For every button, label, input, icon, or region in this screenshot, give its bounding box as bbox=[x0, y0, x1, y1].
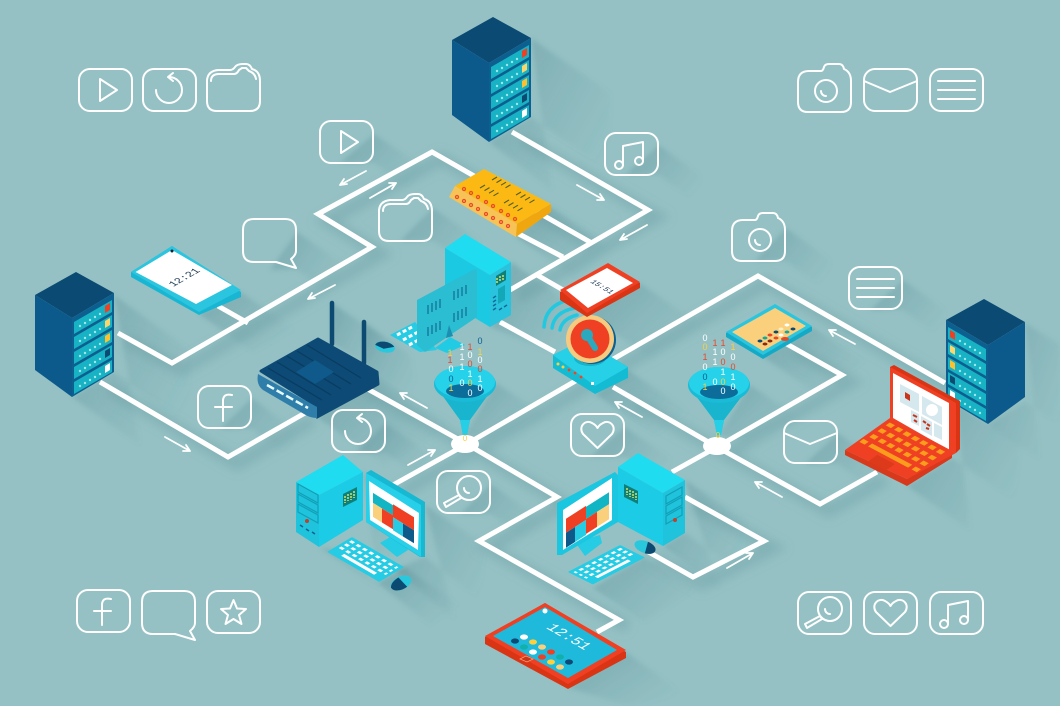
binary digits: 0 bbox=[702, 372, 708, 382]
junction node left bbox=[451, 435, 479, 453]
yellow circuit board bbox=[449, 169, 551, 237]
red laptop bbox=[845, 365, 960, 486]
laptop screen bbox=[890, 365, 960, 453]
icon: heart bbox=[571, 414, 624, 456]
icon: heart bbox=[864, 592, 917, 634]
white tablet with clock: 12:21 bbox=[166, 267, 204, 289]
icon row: bottom right bbox=[798, 592, 983, 634]
icon: list bbox=[930, 69, 983, 111]
red tablet with clock: 12:51 bbox=[541, 621, 596, 653]
icon: speech bubble bbox=[243, 219, 296, 268]
right desktop computer bbox=[557, 453, 685, 584]
icon row: top right bbox=[798, 64, 983, 112]
icon: search bbox=[437, 471, 490, 513]
base box bbox=[553, 340, 628, 394]
central computer bbox=[374, 234, 511, 354]
laptop base bbox=[845, 418, 956, 486]
icon: mail bbox=[864, 69, 917, 111]
icon: folder bbox=[207, 64, 260, 111]
icon: facebook bbox=[198, 386, 251, 428]
junction node right bbox=[703, 437, 731, 455]
red tablet with clock bbox=[485, 603, 626, 689]
wifi router with key bbox=[544, 300, 628, 394]
monitor bbox=[557, 472, 618, 556]
icon: list bbox=[849, 267, 902, 309]
white tablet with clock bbox=[131, 246, 241, 315]
keyboard bbox=[327, 537, 404, 582]
binary digits: 0 bbox=[463, 434, 468, 443]
map icons bbox=[198, 121, 902, 513]
lock circle bbox=[574, 350, 606, 366]
icon row: top left bbox=[79, 64, 260, 111]
binary digits bbox=[447, 336, 483, 443]
mouse bbox=[633, 538, 657, 556]
mouse bbox=[388, 572, 414, 594]
icon: facebook bbox=[77, 590, 130, 632]
server rack: top bbox=[452, 17, 531, 142]
icon: music note bbox=[930, 592, 983, 634]
binary digits: 0101 bbox=[702, 342, 736, 392]
left desktop computer bbox=[296, 455, 425, 594]
tower bbox=[296, 455, 363, 547]
icon: reload bbox=[332, 410, 385, 452]
keyboard behind monitor bbox=[390, 322, 437, 352]
icon: reload bbox=[143, 69, 196, 111]
icon row: bottom left bbox=[77, 590, 260, 640]
server rack: left bbox=[35, 272, 114, 397]
icon: folder bbox=[379, 194, 432, 241]
direction arrows bbox=[165, 171, 855, 568]
yellow tablet bbox=[726, 304, 812, 359]
icon: star bbox=[207, 591, 260, 633]
icon: music note bbox=[605, 133, 658, 175]
red phone with clock bbox=[560, 263, 640, 317]
wifi waves bbox=[544, 300, 577, 330]
icon: play bbox=[320, 121, 373, 163]
tower bbox=[445, 234, 511, 327]
binary digits: 0 bbox=[716, 431, 721, 440]
icon: play bbox=[79, 69, 132, 111]
binary digits: 00 bbox=[448, 336, 483, 384]
icon: speech bubble bbox=[142, 591, 195, 640]
binary digits bbox=[702, 333, 736, 440]
server rack: right bbox=[946, 299, 1025, 424]
router bbox=[258, 303, 378, 418]
monitor bbox=[366, 470, 425, 557]
binary digits: 1101 bbox=[447, 347, 483, 393]
network connection lines bbox=[100, 132, 945, 632]
tower bbox=[618, 453, 685, 546]
monitor back bbox=[417, 269, 477, 353]
mouse bbox=[374, 340, 396, 354]
binary digits: 10011011000 bbox=[448, 342, 483, 398]
keyboard bbox=[568, 545, 645, 584]
icon: camera bbox=[798, 64, 851, 112]
icon: camera bbox=[732, 213, 785, 261]
binary digits: 11100 bbox=[702, 338, 736, 372]
binary digits: 1100 bbox=[447, 342, 483, 374]
right data funnel bbox=[688, 333, 750, 440]
left data funnel bbox=[434, 336, 496, 443]
icon: mail bbox=[784, 421, 837, 463]
red phone with clock: 15:51 bbox=[587, 279, 616, 296]
binary digits: 01001011000 bbox=[702, 333, 736, 396]
icon: search bbox=[798, 592, 851, 634]
